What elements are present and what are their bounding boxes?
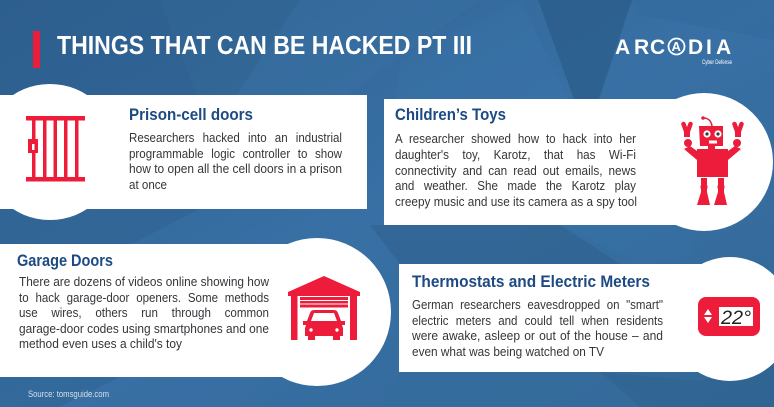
body text: daughter's toy, Karotz, that has Wi-Fi xyxy=(395,147,636,162)
logo: Arcadia Cyber Defense: A xyxy=(672,39,682,54)
heading: Children’s Toys xyxy=(395,105,506,124)
panel: thermostats and electric meters xyxy=(399,257,774,381)
body text xyxy=(395,131,637,209)
body text: to hack garage-door openers. Some methods xyxy=(19,290,269,305)
logo: Arcadia Cyber Defense: A xyxy=(716,36,731,59)
logo: Arcadia Cyber Defense: I xyxy=(706,36,712,59)
card background xyxy=(0,84,367,220)
body text xyxy=(411,297,663,359)
icon: cell door xyxy=(26,116,85,182)
icon: robot xyxy=(684,116,742,205)
logo: Arcadia Cyber Defense: A xyxy=(615,36,630,59)
body text: creepy music and use its camera as a spy tool xyxy=(395,194,637,209)
body text: A researcher showed how to hack into her xyxy=(395,131,637,146)
body text: German researchers eavesdropped on "smart" xyxy=(412,297,663,312)
panel: prison-cell doors xyxy=(0,84,367,220)
source note: Source: tomsguide.com xyxy=(28,389,109,399)
logo: Arcadia Cyber Defense: C xyxy=(650,36,665,59)
card background xyxy=(0,238,391,386)
icon: thermostat: 22° xyxy=(720,308,751,329)
body text: even what was being watched on TV xyxy=(412,344,604,359)
heading: Prison-cell doors xyxy=(129,105,253,124)
logo: Arcadia Cyber Defense xyxy=(615,36,732,66)
body text: connectivity and can read out emails, news xyxy=(395,163,636,178)
card background xyxy=(384,93,773,231)
body text: There are dozens of videos online showing how xyxy=(19,274,270,289)
logo: Arcadia Cyber Defense: D xyxy=(688,36,703,59)
title: THINGS THAT CAN BE HACKED PT III xyxy=(57,30,472,60)
body text: were awake, asleep or out of the house – and xyxy=(411,328,663,343)
body text: at once xyxy=(129,177,167,192)
body text: programmable logic controller to show xyxy=(129,146,343,161)
body text: how to open all the cell doors in a prison xyxy=(129,161,342,176)
panel: children's toys xyxy=(384,93,773,231)
body text xyxy=(19,274,270,351)
icon: thermostat xyxy=(698,297,760,336)
panel: garage doors xyxy=(0,238,391,386)
icon: garage with car xyxy=(288,276,360,340)
accent bar xyxy=(33,31,40,68)
body text: and weather. She made the Karotz play xyxy=(395,178,636,193)
body text: method even uses a child's toy xyxy=(19,336,182,351)
logo: Arcadia Cyber Defense: R xyxy=(634,36,649,59)
body text: garage-door codes using smartphones and one xyxy=(19,321,269,336)
heading: Garage Doors xyxy=(17,251,113,270)
body text: use wires, others run through common xyxy=(19,305,269,320)
body text: electric meters and could tell when residents xyxy=(412,313,663,328)
logo: Arcadia Cyber Defense: Cyber Defense xyxy=(702,59,732,66)
heading: Thermostats and Electric Meters xyxy=(412,272,650,291)
body text: Researchers hacked into an industrial xyxy=(129,130,342,145)
body text xyxy=(129,130,343,192)
card background xyxy=(399,257,774,381)
